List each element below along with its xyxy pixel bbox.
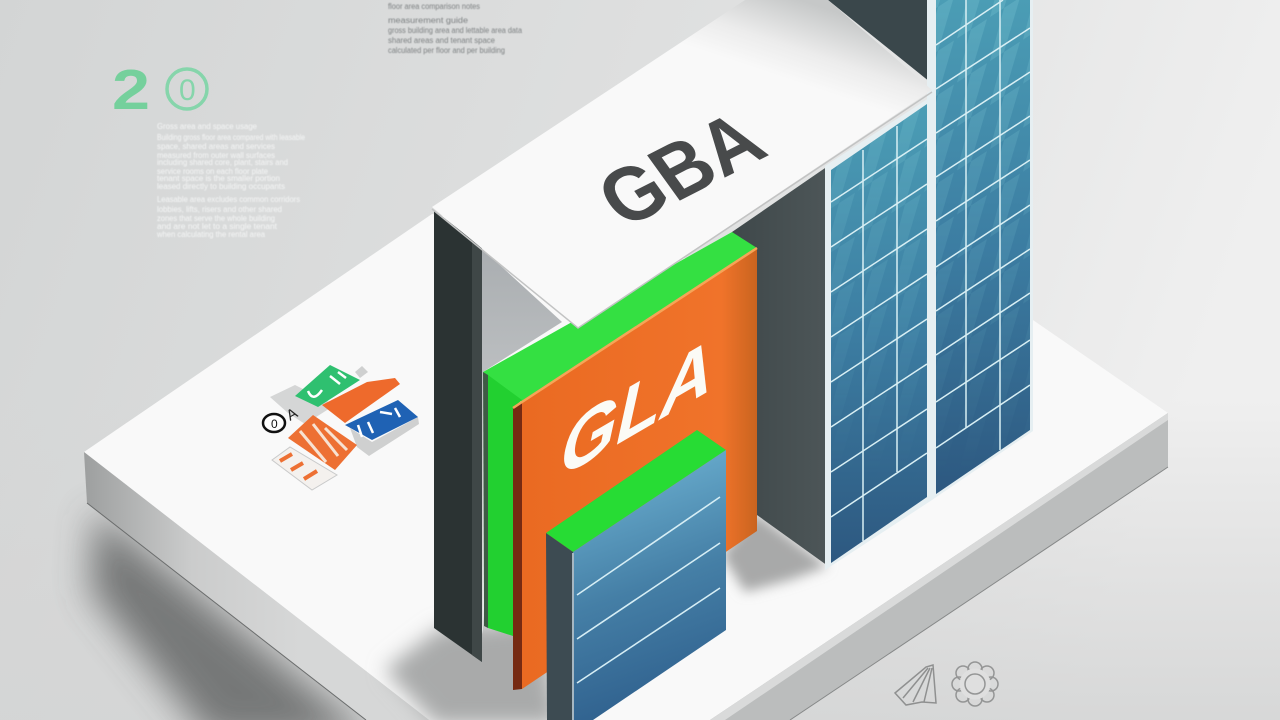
white small text block: lobbies, lifts, risers and other shared: [157, 205, 282, 214]
white small text block: Building gross floor area compared with leasable: [157, 133, 305, 142]
white small text block: leased directly to building occupants: [157, 182, 285, 191]
opening behind GLA block: [478, 245, 562, 650]
left dark column: [434, 210, 482, 662]
top grey text block: gross building area and lettable area data: [388, 26, 522, 35]
rear dark wall: [732, 166, 828, 566]
top grey text block: floor area comparison notes: [388, 2, 480, 11]
icon: stacked document cards: 0: [271, 417, 278, 431]
building shadows on platform: [385, 512, 828, 720]
white small text block: zones that serve the whole building: [157, 214, 275, 223]
tall glass facade: [927, 0, 1033, 500]
GBA label: GBA: [582, 96, 781, 243]
top grey text block: measurement guide: [388, 16, 469, 25]
icon: flower: [952, 662, 998, 706]
top grey text block: shared areas and tenant space: [388, 36, 496, 45]
icon: stacked document cards: [263, 365, 419, 490]
top grey text block: [388, 2, 522, 55]
GBA roof: [432, 0, 932, 328]
white small text block: space, shared areas and services: [157, 142, 275, 151]
green year mark: [112, 58, 207, 122]
dark upper wall: [828, 0, 930, 82]
top grey text block: calculated per floor and per building: [388, 46, 505, 55]
white small text block: measured from outer wall surfaces: [157, 151, 275, 160]
white small text block: and are not let to a single tenant: [157, 222, 278, 231]
white small text block: tenant space is the smaller portion: [157, 174, 280, 183]
green year mark: 2: [112, 58, 150, 122]
short glass facade: [825, 96, 932, 570]
white small text block: Leasable area excludes common corridors: [157, 195, 300, 204]
white small text block: including shared core, plant, stairs and: [157, 158, 288, 167]
white small text block: service rooms on each floor plate: [157, 167, 269, 176]
green year mark: 0: [179, 74, 196, 107]
front blue block: [546, 430, 726, 720]
white small text block: [156, 122, 305, 239]
icon: folded fan: [895, 665, 936, 705]
GLA label: GLA: [552, 315, 725, 498]
icon: stacked document cards: A: [284, 405, 301, 424]
white small text block: when calculating the rental area: [156, 230, 266, 239]
white small text block: Gross area and space usage: [157, 122, 258, 131]
orange GLA block: [513, 248, 757, 690]
green GLA layer: [483, 232, 757, 636]
platform: [84, 214, 1168, 720]
